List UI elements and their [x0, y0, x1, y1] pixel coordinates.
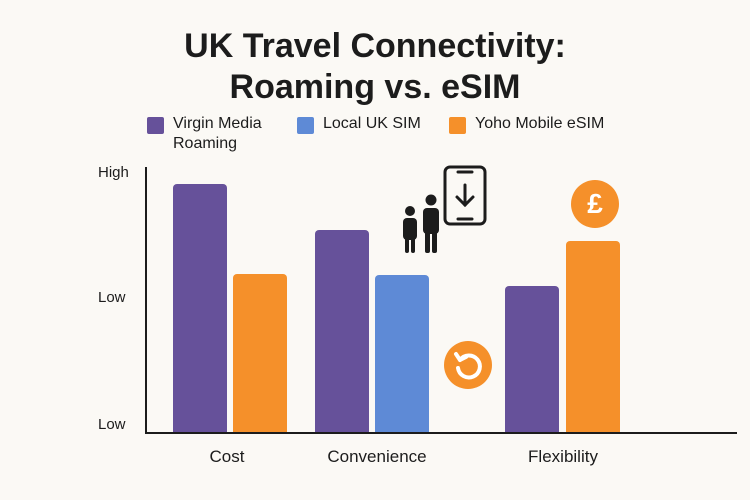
- axes: [145, 167, 737, 434]
- axis labels: High: [98, 164, 129, 181]
- category labels: [210, 447, 598, 466]
- bar: flexibility yoho: [566, 241, 620, 432]
- axis labels: [98, 164, 129, 433]
- title: Roaming vs. eSIM: [230, 68, 520, 106]
- icon: pound: £: [587, 188, 603, 219]
- icon: phone download: [444, 166, 486, 226]
- title: [184, 27, 566, 106]
- category labels: Cost: [210, 447, 244, 466]
- bar: convenience virgin: [315, 230, 369, 432]
- legend: virgin: Virgin Media: [173, 115, 262, 132]
- axis labels: Low: [98, 416, 126, 433]
- bar: flexibility virgin: [505, 286, 559, 432]
- icon: people: [403, 194, 439, 253]
- bar chart: [173, 184, 620, 432]
- category labels: Convenience: [327, 447, 427, 466]
- legend: virgin: Roaming: [173, 135, 237, 152]
- axis labels: Low: [98, 289, 126, 306]
- legend: [147, 115, 604, 152]
- legend: virgin: [147, 115, 262, 152]
- title: UK Travel Connectivity:: [184, 27, 566, 65]
- bar: cost virgin: [173, 184, 227, 432]
- legend: local: Local UK SIM: [323, 115, 421, 132]
- icon: pound: [571, 180, 619, 228]
- legend: yoho: Yoho Mobile eSIM: [475, 115, 604, 132]
- bar: convenience local: [375, 275, 429, 432]
- bar: cost yoho: [233, 274, 287, 432]
- icon: refresh: [444, 341, 492, 389]
- category labels: Flexibility: [528, 447, 598, 466]
